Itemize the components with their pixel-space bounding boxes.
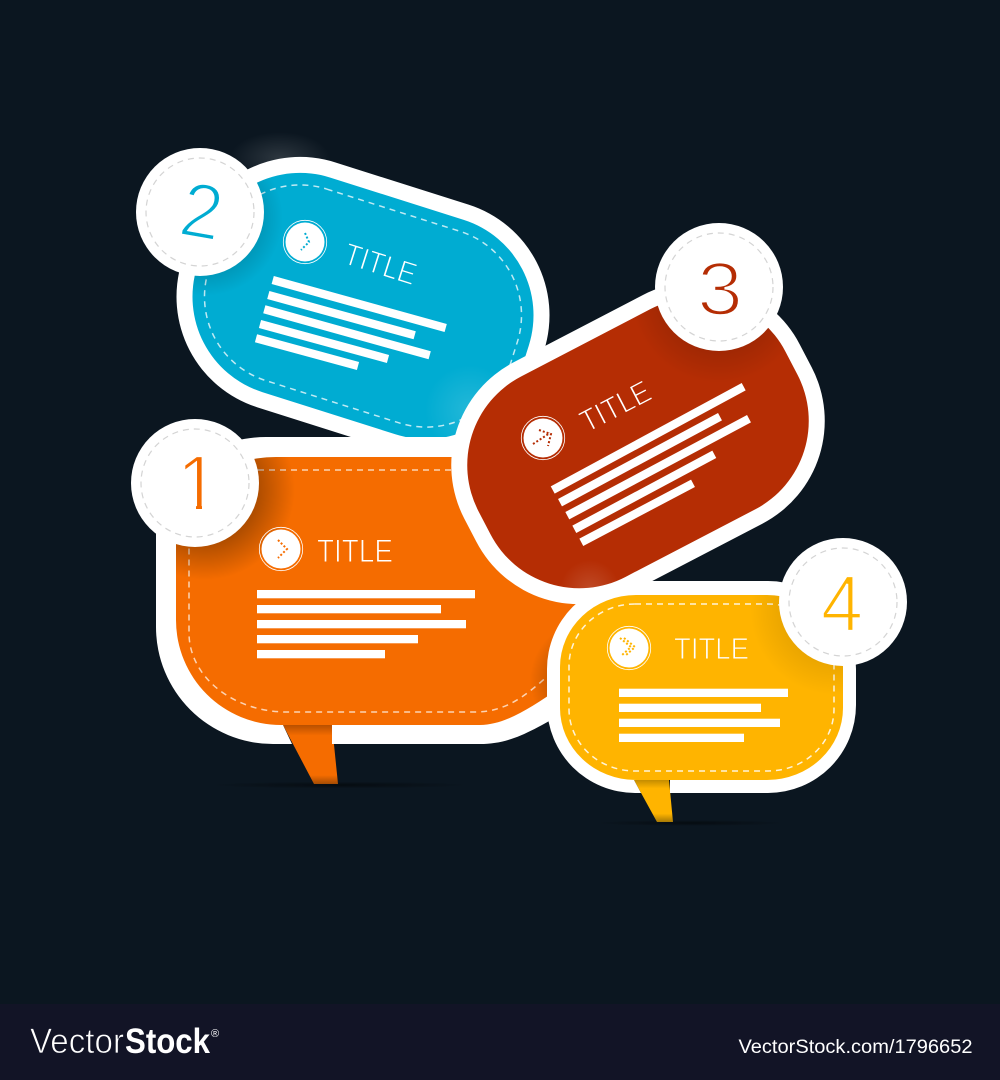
badge: number 1: 1: [177, 439, 219, 528]
red bubble shading: [560, 207, 807, 620]
orange title: TITLE: [317, 533, 393, 569]
icon: yellow double chevron: [607, 626, 651, 670]
yellow title: TITLE: [674, 631, 749, 666]
floor shadow: orange bubble: [210, 782, 470, 788]
icon: orange chevron: [259, 527, 303, 571]
footer band: [0, 1004, 1000, 1080]
watermark logo: ®: [211, 1028, 219, 1040]
red bubble body: [432, 263, 844, 623]
watermark url: VectorStock.com/1796652: [738, 1036, 972, 1058]
red title: TITLE: [574, 374, 657, 439]
yellow tail: [634, 780, 673, 822]
yellow bubble white border: [547, 581, 856, 793]
blue bubble stitching: [182, 162, 544, 450]
badge: number 3: 3: [697, 247, 743, 331]
icon: blue chevron: [283, 220, 327, 264]
badge: number 4: 4: [821, 559, 863, 648]
orange tail: [283, 725, 338, 784]
glow above blue bubble: [230, 132, 330, 184]
yellow bubble stitching: [569, 604, 834, 771]
icon: red arrow: [521, 416, 565, 460]
badge: number 2: 2: [174, 164, 230, 258]
blue bubble body: [167, 147, 559, 465]
orange text lines: [257, 590, 475, 658]
red bubble white border: [411, 241, 865, 645]
red text lines: [553, 387, 749, 542]
badge: number 3: [655, 223, 783, 351]
badge: number 1: [131, 419, 259, 547]
blue title: TITLE: [340, 236, 421, 292]
panel: step 4 yellow bubble: [547, 581, 856, 822]
yellow bubble body: [560, 595, 843, 780]
blue bubble shading: [127, 140, 515, 455]
orange bubble body: [176, 457, 590, 725]
orange bubble white border: [156, 437, 600, 744]
blue text lines: [256, 280, 446, 366]
yellow bubble shadow: [764, 595, 843, 682]
yellow text lines: [619, 689, 788, 742]
panel: step 1 orange bubble: [156, 437, 576, 784]
watermark logo: [30, 1022, 219, 1061]
watermark logo: Vector: [30, 1022, 124, 1061]
watermark logo: Stock: [125, 1022, 210, 1061]
floor shadow: yellow bubble: [595, 820, 785, 826]
orange bubble shadows: [115, 400, 650, 740]
panel: step 3 red bubble: [451, 290, 825, 604]
badge: number 2: [136, 148, 264, 276]
orange bubble stitching: [189, 470, 560, 712]
blue bubble white border: [147, 127, 579, 485]
badge: number 4: [779, 538, 907, 666]
panel: step 2 blue bubble: [176, 156, 550, 437]
